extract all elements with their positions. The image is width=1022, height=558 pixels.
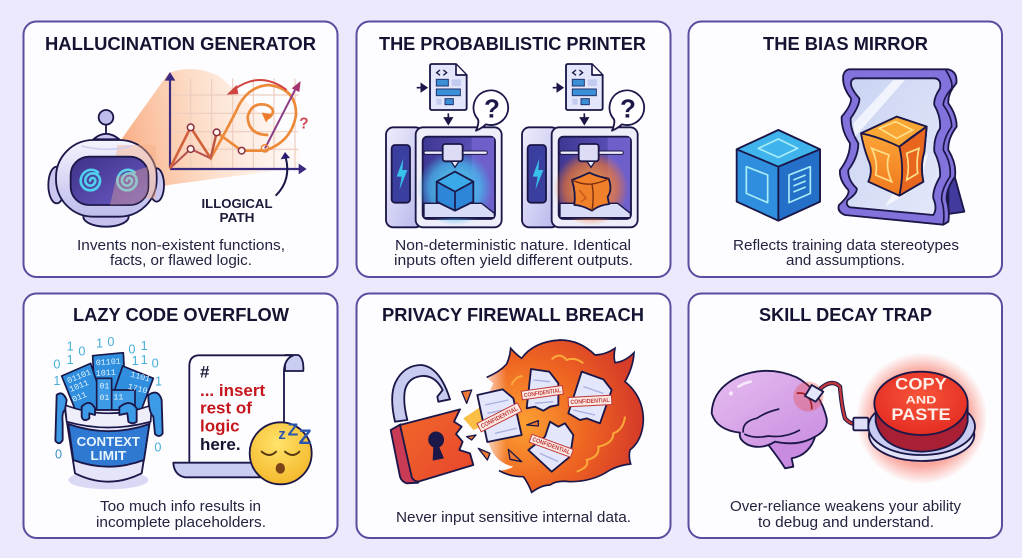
- icon: overflowing bucket labelled context limit: 0: [107, 335, 114, 349]
- icon: overflowing bucket labelled context limit: 01: [99, 393, 109, 403]
- description: Reflects training data stereotypes: [733, 238, 959, 254]
- description: and assumptions.: [786, 253, 905, 269]
- panel: hallucination generator: [24, 22, 338, 277]
- icon: scroll with placeholder comment: #: [200, 362, 210, 381]
- heading: the probabilistic printer: THE PROBABILISTIC PRINTER: [379, 33, 646, 54]
- icon: overflowing bucket labelled context limit: 1: [141, 339, 148, 353]
- icon: overflowing bucket labelled context limit: 0: [55, 447, 62, 461]
- description: [96, 499, 266, 531]
- description: [77, 238, 285, 269]
- panel: lazy code overflow: [24, 294, 338, 538]
- description: inputs often yield different outputs.: [394, 253, 633, 269]
- heading: lazy code overflow: LAZY CODE OVERFLOW: [73, 304, 290, 325]
- icon: confidential documents: CONFIDENTIAL: [524, 388, 562, 399]
- icon: sleeping emoji: [250, 419, 312, 484]
- icon: overflowing bucket labelled context limit: 0: [53, 357, 60, 371]
- heading: skill decay trap: SKILL DECAY TRAP: [759, 304, 932, 325]
- icon: sleeping emoji: z: [278, 427, 286, 443]
- icon: blue cube: [737, 130, 820, 221]
- icon: robot with spiral eyes: [48, 110, 164, 227]
- description: [394, 238, 633, 269]
- description: incomplete placeholders.: [96, 515, 266, 531]
- icon: overflowing bucket labelled context limit: 01101: [66, 367, 93, 386]
- description: Over-reliance weakens your ability: [730, 499, 962, 515]
- icon: question bubble: [610, 90, 644, 131]
- heading: privacy firewall breach: PRIVACY FIREWALL BREACH: [382, 304, 644, 325]
- icon: question bubble: ?: [620, 94, 636, 124]
- icon: overflowing bucket labelled context limit: 01: [99, 381, 109, 391]
- label: illogical path: [202, 196, 273, 225]
- icon: overflowing bucket labelled context limit: 011: [71, 390, 88, 405]
- icon: printer with blue cube: [386, 64, 502, 227]
- icon: scroll with placeholder comment: ... insert: [200, 381, 265, 400]
- icon: brain wired to button: PASTE: [891, 405, 951, 424]
- description: Never input sensitive internal data.: [396, 510, 631, 526]
- panel: skill decay trap: [688, 294, 1002, 538]
- icon: overflowing bucket labelled context limit: 1: [53, 374, 60, 388]
- icon: overflowing bucket labelled context limit: 11: [113, 392, 123, 402]
- icon: overflowing bucket labelled context limit: 1: [96, 336, 103, 350]
- label: illogical path: PATH: [220, 210, 254, 225]
- icon: overflowing bucket labelled context limit: 0: [152, 357, 159, 371]
- heading: the bias mirror: THE BIAS MIRROR: [763, 33, 928, 54]
- icon: scroll with placeholder comment: here.: [200, 435, 241, 454]
- icon: overflowing bucket labelled context limit: CONTEXT: [77, 435, 140, 449]
- icon: overflowing bucket labelled context limit: 0: [78, 345, 85, 359]
- icon: confidential documents: CONFIDENTIAL: [570, 398, 610, 406]
- heading: hallucination generator: HALLUCINATION GENERATOR: [45, 33, 316, 54]
- icon: overflowing bucket labelled context limit: [53, 335, 163, 489]
- icon: brain wired to button: [712, 352, 988, 484]
- icon: scroll with placeholder comment: logic: [200, 417, 240, 436]
- icon: sleeping emoji: Z: [299, 425, 312, 449]
- description: [730, 499, 962, 531]
- icon: overflowing bucket labelled context limit: 1101: [129, 370, 151, 384]
- icon: brain wired to button: AND: [906, 394, 936, 406]
- icon: overflowing bucket labelled context limit: 0: [154, 441, 161, 455]
- icon: question bubble: ?: [484, 94, 500, 124]
- icon: brain wired to button: COPY: [895, 374, 947, 393]
- panel: the bias mirror: [688, 22, 1002, 277]
- icon: overflowing bucket labelled context limit: 1: [67, 340, 74, 354]
- description: to debug and understand.: [758, 515, 934, 531]
- icon: overflowing bucket labelled context limit: 1: [67, 353, 74, 367]
- description: facts, or flawed logic.: [110, 253, 252, 269]
- icon: fire explosion: [462, 340, 643, 492]
- description: Non-deterministic nature. Identical: [395, 238, 631, 254]
- icon: wavy mirror reflecting warped cube: [838, 69, 964, 225]
- icon: overflowing bucket labelled context limit: 1: [155, 375, 162, 389]
- description: [733, 238, 959, 269]
- icon: overflowing bucket labelled context limit: 1: [132, 354, 139, 368]
- icon: broken padlock: [391, 365, 473, 483]
- description: Too much info results in: [100, 499, 261, 515]
- icon: confidential documents: [477, 369, 612, 472]
- chart: illogical path graph with projection beam: ?: [299, 116, 309, 133]
- icon: overflowing bucket labelled context limit: LIMIT: [90, 449, 127, 463]
- icon: overflowing bucket labelled context limit: 01101: [96, 357, 121, 368]
- icon: question bubble: [474, 90, 508, 131]
- icon: sleeping emoji: Z: [288, 419, 299, 439]
- icon: overflowing bucket labelled context limit: 1710: [127, 382, 148, 396]
- icon: overflowing bucket labelled context limit: 1: [141, 353, 148, 367]
- icon: scroll with placeholder comment: [173, 355, 303, 477]
- icon: printer with warped orange cube: [522, 64, 638, 227]
- icon: confidential documents: CONFIDENTIAL: [480, 405, 519, 430]
- description: Invents non-existent functions,: [77, 238, 285, 254]
- panel: the probabilistic printer: [356, 22, 670, 277]
- label: illogical path: ILLOGICAL: [202, 196, 273, 211]
- chart: illogical path graph with projection beam: [110, 69, 309, 198]
- panel: privacy firewall breach: [356, 294, 670, 538]
- icon: overflowing bucket labelled context limit: 1011: [68, 378, 90, 395]
- icon: overflowing bucket labelled context limit: 0: [128, 342, 135, 356]
- icon: confidential documents: CONFIDENTIAL: [531, 437, 571, 456]
- icon: overflowing bucket labelled context limit: 1011: [96, 368, 116, 379]
- icon: scroll with placeholder comment: rest of: [200, 399, 252, 418]
